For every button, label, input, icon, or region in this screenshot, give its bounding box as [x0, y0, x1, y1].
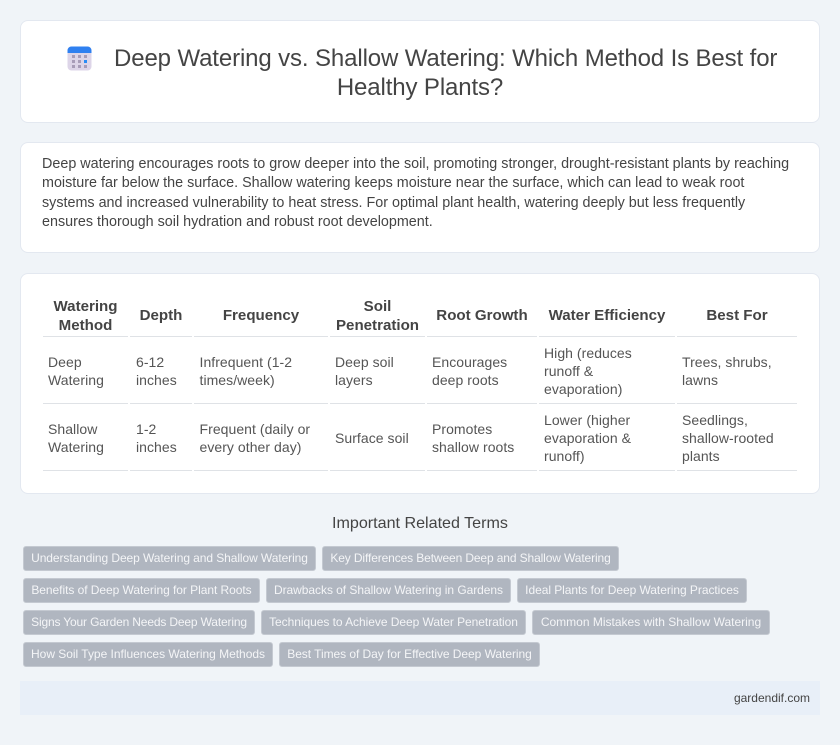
comparison table: Watering — [53, 298, 118, 315]
related term tags: Understanding Deep Watering and Shallow Watering — [31, 551, 308, 565]
comparison table: Shallow — [48, 421, 97, 437]
related term tags: Drawbacks of Shallow Watering in Gardens — [274, 583, 503, 597]
comparison table: Depth — [140, 307, 182, 324]
description text — [42, 156, 789, 230]
comparison table: shallow-rooted — [682, 430, 774, 446]
comparison table: evaporation) — [544, 381, 622, 397]
related term tags: Key Differences Between Deep and Shallow Watering — [330, 551, 611, 565]
comparison table: High (reduces — [544, 345, 632, 361]
related terms heading: Important Related Terms — [332, 514, 508, 532]
comparison table: inches — [136, 372, 177, 388]
comparison table: Infrequent (1-2 — [200, 354, 292, 370]
comparison table: Trees, shrubs, — [682, 354, 772, 370]
related term tags — [23, 546, 770, 667]
table card — [20, 273, 820, 494]
comparison table: shallow roots — [432, 439, 514, 455]
comparison table: times/week) — [200, 372, 275, 388]
comparison table: every other day) — [200, 439, 301, 455]
comparison table: Promotes — [432, 421, 492, 437]
description text: ensures thorough soil hydration and robust root development. — [42, 214, 433, 230]
comparison table: Frequency — [223, 307, 299, 324]
description text: moisture far below the surface. Shallow watering keeps moisture near the surface, which can lead to weak root — [42, 175, 744, 191]
related term tags: Common Mistakes with Shallow Watering — [541, 615, 761, 629]
comparison table: Watering — [48, 372, 104, 388]
footer source: gardendif.com — [734, 691, 810, 705]
comparison table: inches — [136, 439, 177, 455]
comparison table: Method — [59, 317, 112, 334]
comparison table: evaporation & — [544, 430, 631, 446]
related term tags: Benefits of Deep Watering for Plant Roots — [31, 583, 252, 597]
related term tags: Ideal Plants for Deep Watering Practices — [525, 583, 739, 597]
comparison table: Frequent (daily or — [200, 421, 310, 437]
related term tags: Best Times of Day for Effective Deep Watering — [287, 647, 532, 661]
title: Deep Watering vs. Shallow Watering: Which Method Is Best for — [114, 45, 777, 72]
comparison table: Surface soil — [335, 430, 409, 446]
comparison table: runoff & — [544, 363, 593, 379]
comparison table: plants — [682, 448, 720, 464]
comparison table — [43, 298, 797, 471]
comparison table: Lower (higher — [544, 412, 630, 428]
comparison table: Penetration — [336, 317, 419, 334]
comparison table: runoff) — [544, 448, 585, 464]
comparison table: Water Efficiency — [549, 307, 665, 324]
comparison table: 6-12 — [136, 354, 164, 370]
comparison table: Encourages — [432, 354, 507, 370]
comparison table: layers — [335, 372, 373, 388]
footer bar — [20, 681, 820, 715]
comparison table: lawns — [682, 372, 718, 388]
comparison table: Deep soil — [335, 354, 394, 370]
header card — [20, 20, 820, 123]
description text: systems and increased vulnerability to heat stress. For optimal plant health, watering deeply but less frequently — [42, 195, 745, 211]
related term tags: How Soil Type Influences Watering Methods — [31, 647, 265, 661]
comparison table: Soil — [364, 298, 391, 315]
comparison table: Deep — [48, 354, 82, 370]
icon: calendar — [68, 46, 92, 70]
comparison table: Best For — [706, 307, 768, 324]
description text: Deep watering encourages roots to grow deeper into the soil, promoting stronger, drought-resistant plants by reaching — [42, 156, 789, 172]
comparison table: 1-2 — [136, 421, 156, 437]
related term tags: Signs Your Garden Needs Deep Watering — [31, 615, 247, 629]
related term tags: Techniques to Achieve Deep Water Penetration — [269, 615, 518, 629]
comparison table: deep roots — [432, 372, 499, 388]
comparison table: Seedlings, — [682, 412, 748, 428]
text: Healthy Plants? — [337, 74, 503, 101]
description card — [20, 142, 820, 253]
comparison table: Root Growth — [436, 307, 528, 324]
comparison table: Watering — [48, 439, 104, 455]
